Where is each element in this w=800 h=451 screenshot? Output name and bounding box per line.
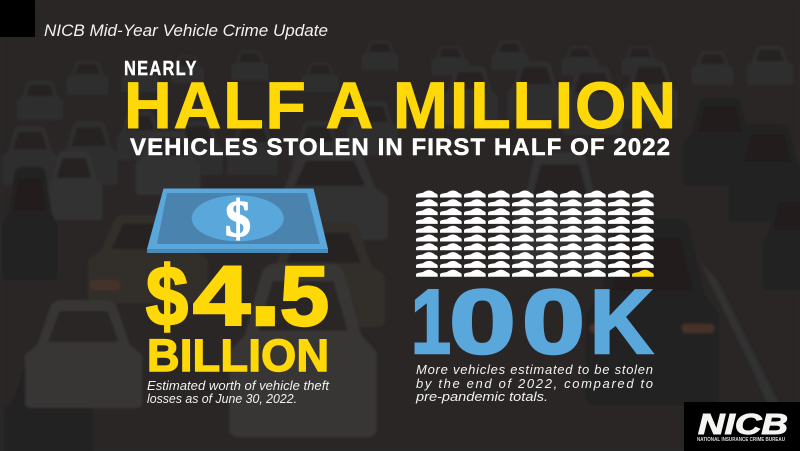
- stat: 100K: 0: [449, 272, 516, 373]
- title: nearly: NEARLY: [124, 56, 198, 79]
- value: $4.5: 5: [280, 249, 329, 343]
- title: vehicles stolen: VEHICLES STOLEN IN FIRST HALF OF 2022: [130, 134, 670, 161]
- icon: dollar bill: $: [225, 191, 251, 248]
- stat: 4.5 billion: [146, 219, 330, 406]
- title: half a million: HALF A MILLION: [124, 68, 676, 142]
- title block: [124, 56, 676, 161]
- stat: 100K: 1: [411, 272, 451, 373]
- caption: theft losses: Estimated worth of vehicle theft: [147, 378, 330, 393]
- caption: more vehicles: pre-pandemic totals.: [415, 389, 548, 404]
- value: $4.5: .: [249, 219, 282, 351]
- icon: dollar bill: [147, 188, 328, 253]
- caption: theft losses: losses as of June 30, 2022.: [147, 391, 297, 406]
- value: $4.5: $: [146, 249, 188, 343]
- pictogram: car grid: [416, 190, 654, 277]
- value: billion: BILLION: [147, 330, 329, 381]
- caption: more vehicles: by the end of 2022, compared to: [416, 376, 653, 391]
- caption: theft losses: [147, 378, 330, 406]
- logo: NICB: [684, 402, 800, 451]
- value: $4.5: [146, 219, 329, 351]
- stat: 100K: 0: [522, 272, 585, 373]
- value: $4.5: 4: [193, 249, 250, 343]
- stat: 100K: K: [590, 272, 653, 373]
- black corner square: [0, 0, 35, 37]
- logo: NICB: NATIONAL INSURANCE CRIME BUREAU: [697, 437, 785, 443]
- caption: more vehicles: More vehicles estimated to be stolen: [416, 362, 653, 377]
- stat: 100K: [411, 272, 653, 373]
- header text: NICB Mid-Year Vehicle Crime Update: [44, 21, 328, 40]
- caption: more vehicles: [415, 362, 653, 404]
- logo: NICB: NICB: [698, 409, 788, 441]
